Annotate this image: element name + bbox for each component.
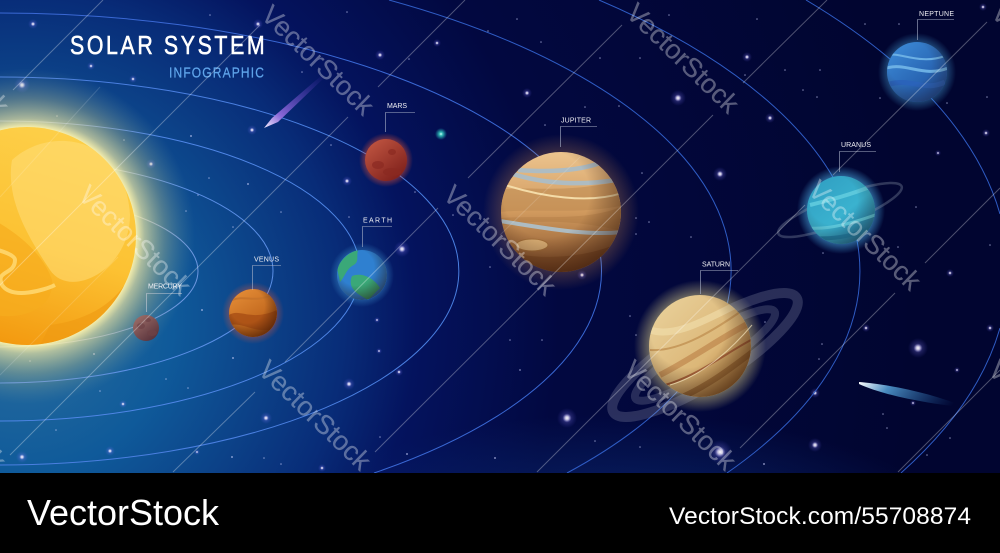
planet: Neptune [878,11,956,111]
label: Mars: MARS [387,103,407,110]
footer bar [0,473,1000,553]
watermark: VectorStock [617,354,742,476]
leader: Neptune [918,20,954,40]
planet: Saturn [607,262,803,422]
planet: Mercury [133,284,182,341]
comet: purple [264,75,325,128]
leader: Saturn [700,270,738,294]
planet: Mars [359,103,415,187]
ring [773,173,907,247]
planet: Earth [330,218,394,307]
subtitle: INFOGRAPHIC [169,64,265,81]
watermark: VectorStock [620,0,745,119]
leader: Jupiter [560,126,597,147]
label: Saturn: SATURN [702,262,730,268]
comet: blue [859,382,968,408]
leader: Uranus [840,152,876,172]
watermark: VectorStock [802,174,927,296]
planet: Uranus [773,142,907,254]
watermark: VectorStock [255,0,380,121]
label: Mercury: MERCURY [148,284,182,290]
label: Jupiter: JUPITER [561,118,591,124]
label: Neptune: NEPTUNE [919,11,954,18]
title: SOLAR SYSTEM [70,31,267,61]
planet: Venus [222,256,284,344]
watermark: VectorStock [72,179,197,301]
planet: Jupiter [483,118,639,290]
leader: Venus [252,266,281,290]
rings [599,274,811,436]
label: Venus: VENUS [254,256,279,264]
leader: Mars [386,112,415,132]
label: Uranus: URANUS [841,142,871,149]
leader: Mercury [146,294,182,312]
leader: Earth [362,226,392,247]
watermark: VectorStock [252,354,377,476]
sun [0,68,195,404]
footer logo: VectorStock [27,492,220,533]
footer image id: VectorStock.com/55708874 [669,503,971,530]
label: Earth: EARTH [363,218,392,224]
watermark: VectorStock [437,179,562,301]
